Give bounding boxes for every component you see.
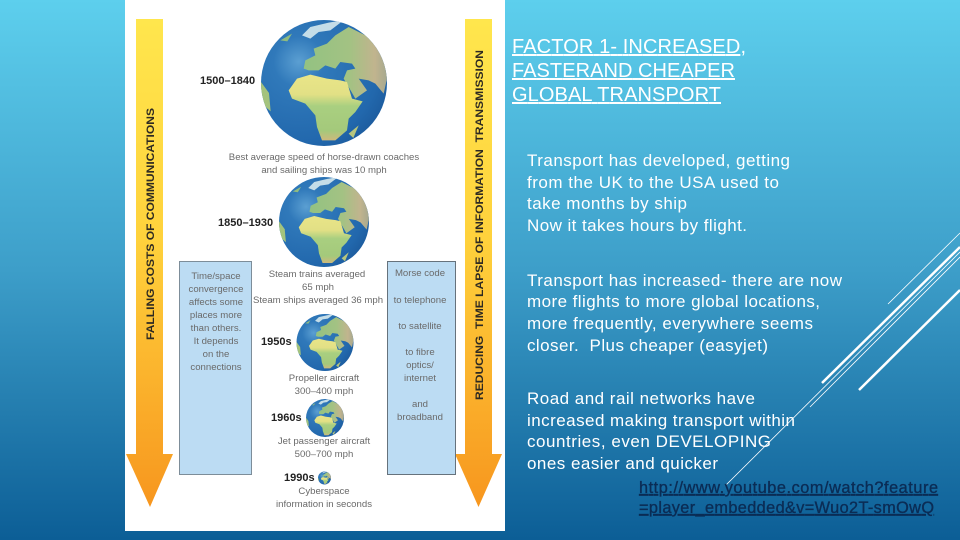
panel: time/space convergence note: It depends	[194, 336, 239, 347]
text block: more flights: Transport has increased- there are now	[527, 271, 843, 290]
text block: more flights: more frequently, everywhere seems	[527, 314, 813, 333]
text block: development of transport: take months by ship	[527, 194, 687, 213]
link: youtube video: http://www.youtube.com/watch?feature	[639, 479, 938, 497]
globe: 1500-1840: and sailing ships was 10 mph	[261, 165, 387, 176]
globe: 1850-1930: Steam ships averaged 36 mph	[253, 295, 383, 306]
arrow: falling costs of communications	[126, 19, 173, 507]
globe: 1850-1930: Steam trains averaged	[269, 269, 365, 280]
decorative diagonal lines	[726, 233, 960, 485]
globe: 1850-1930	[218, 177, 383, 306]
text block: road and rail: increased making transport within	[527, 411, 795, 430]
arrow: reducing time lapse of information transmission: REDUCING TIME LAPSE OF INFORMATION TRANSMISSION	[474, 50, 486, 400]
globe: 1960s: 1960s	[271, 412, 302, 424]
text block: road and rail	[527, 389, 795, 473]
text block: more flights	[527, 271, 843, 355]
text block: development of transport: from the UK to the USA used to	[527, 173, 779, 192]
text block: development of transport	[527, 151, 790, 235]
globe: 1850-1930: 65 mph	[302, 282, 334, 293]
globe: 1990s: 1990s	[284, 472, 315, 484]
globe: 1960s: Jet passenger aircraft	[278, 436, 370, 447]
panel: transport diagram	[125, 0, 505, 531]
globe: 1500-1840	[200, 20, 419, 176]
globe: 1990s	[276, 472, 372, 510]
panel: time/space convergence note: Time/space	[191, 271, 241, 282]
panel: information technology progression: and	[412, 399, 428, 410]
link: youtube video: =player_embedded&v=Wuo2T-smOwQ	[639, 499, 934, 517]
arrow: falling costs of communications: FALLING COSTS OF COMMUNICATIONS	[145, 108, 157, 340]
heading: GLOBAL TRANSPORT	[512, 84, 721, 106]
text block: more flights: closer. Plus cheaper (easyjet)	[527, 336, 768, 355]
globe: 1990s: information in seconds	[276, 499, 372, 510]
text block: development of transport: Now it takes hours by flight.	[527, 216, 747, 235]
panel: time/space convergence note: convergence	[189, 284, 243, 295]
arrow: reducing time lapse of information transmission	[455, 19, 502, 507]
panel: information technology progression: to telephone	[394, 295, 446, 306]
panel: information technology progression: broadband	[397, 412, 443, 423]
panel: time/space convergence note	[180, 262, 252, 474]
text block: road and rail: countries, even DEVELOPING	[527, 432, 771, 451]
panel: time/space convergence note: on the	[203, 349, 229, 360]
globe: 1950s: Propeller aircraft	[289, 373, 360, 384]
text block: more flights: more flights to more global locations,	[527, 292, 820, 311]
panel: information technology progression: to satellite	[398, 321, 442, 332]
panel: information technology progression: optics/	[406, 360, 434, 371]
globe: 1850-1930: 1850–1930	[218, 217, 273, 229]
heading	[512, 36, 746, 106]
text block: road and rail: Road and rail networks have	[527, 389, 755, 408]
heading: FASTERAND CHEAPER	[512, 60, 735, 82]
globe: 1500-1840: 1500–1840	[200, 75, 255, 87]
panel: time/space convergence note: connections	[190, 362, 242, 373]
panel: time/space convergence note: affects some	[189, 297, 243, 308]
panel: information technology progression	[388, 262, 456, 474]
panel: time/space convergence note: places more	[190, 310, 242, 321]
globe: 1990s: Cyberspace	[298, 486, 350, 497]
link: youtube video	[639, 479, 938, 517]
panel: information technology progression: Morse code	[395, 268, 445, 279]
heading: FACTOR 1- INCREASED,	[512, 36, 746, 58]
panel: information technology progression: to fibre	[405, 347, 435, 358]
text block: development of transport: Transport has developed, getting	[527, 151, 790, 170]
globe: 1950s: 1950s	[261, 336, 292, 348]
panel: time/space convergence note: than others.	[191, 323, 241, 334]
globe: 1500-1840: Best average speed of horse-drawn coaches	[229, 152, 419, 163]
globe: 1950s	[261, 314, 360, 397]
globe: 1960s: 500–700 mph	[295, 449, 353, 460]
globe: 1960s	[271, 399, 370, 460]
panel: information technology progression: internet	[404, 373, 436, 384]
text block: road and rail: ones easier and quicker	[527, 454, 718, 473]
globe: 1950s: 300–400 mph	[295, 386, 353, 397]
